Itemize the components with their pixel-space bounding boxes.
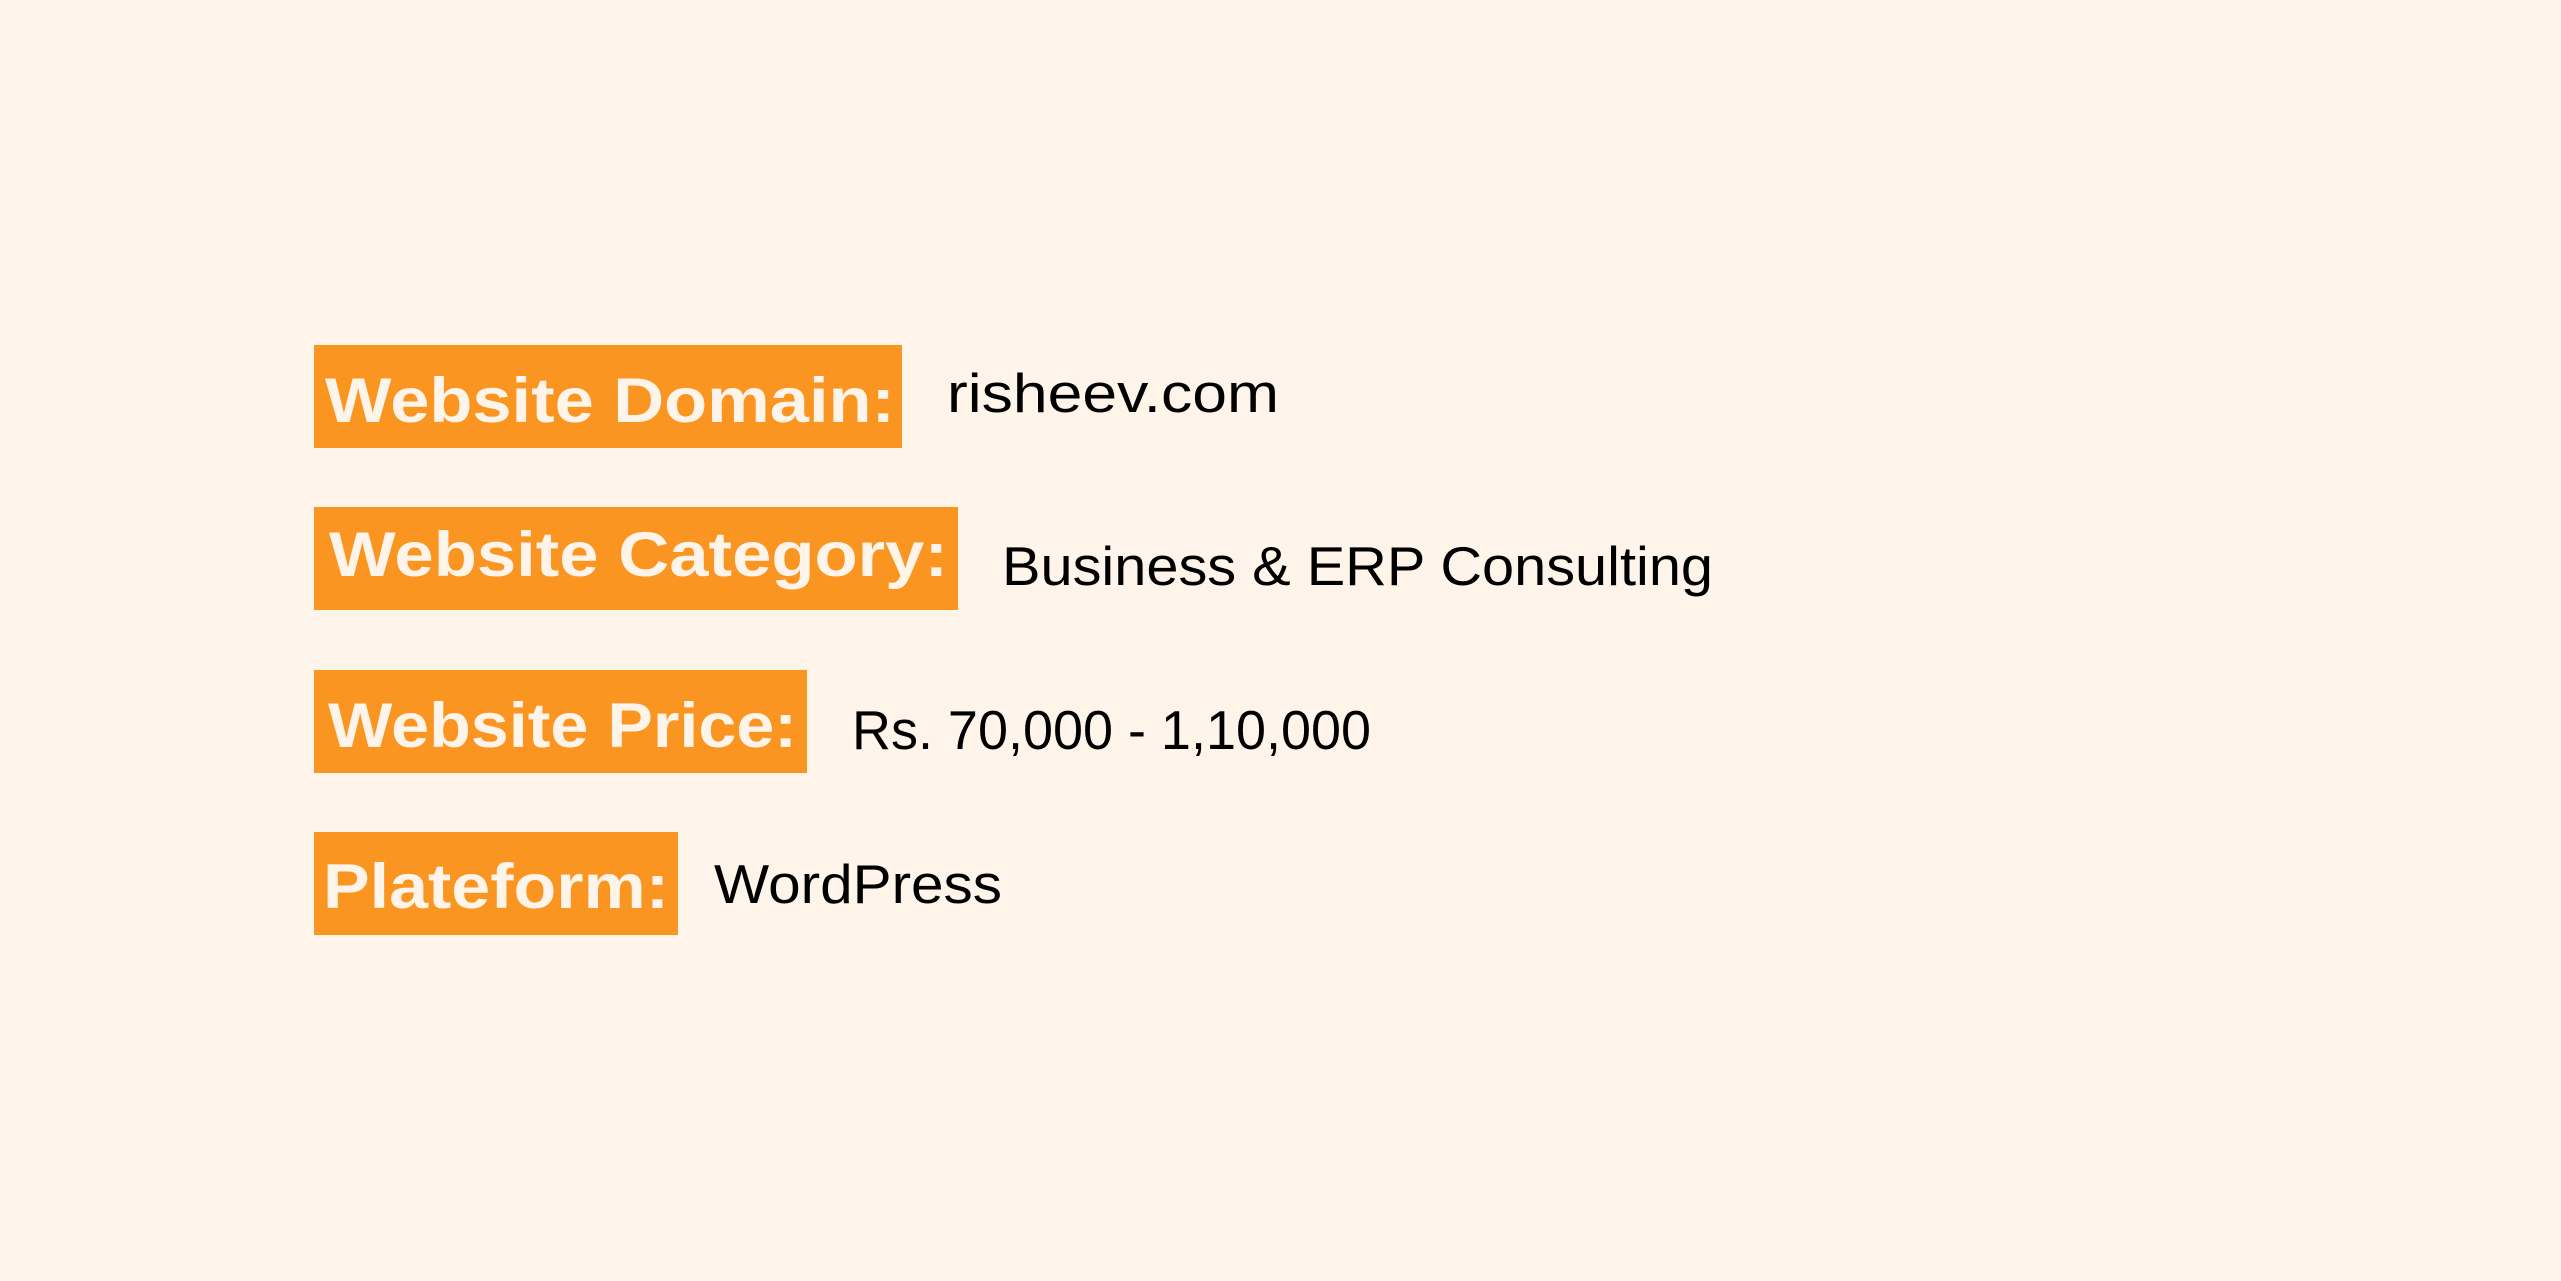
row: website domain: [314, 345, 1279, 448]
label: website category: [314, 507, 958, 610]
value: website domain: risheev.com: [947, 362, 1279, 424]
label: website price: Website Price:: [328, 691, 797, 761]
row: website category: [314, 507, 1713, 610]
value: website price: Rs. 70,000 - 1,10,000: [852, 699, 1371, 761]
row: platform: [314, 832, 1002, 935]
label: website domain: Website Domain:: [325, 366, 895, 436]
value: website category: Business & ERP Consulting: [1002, 535, 1713, 597]
row: website price: [314, 670, 1371, 773]
label: platform: Plateform:: [323, 852, 669, 922]
label: website domain: [314, 345, 902, 448]
value: platform: WordPress: [714, 853, 1002, 915]
label: website category: Website Category:: [329, 520, 948, 590]
label: platform: [314, 832, 678, 935]
label: website price: [314, 670, 807, 773]
